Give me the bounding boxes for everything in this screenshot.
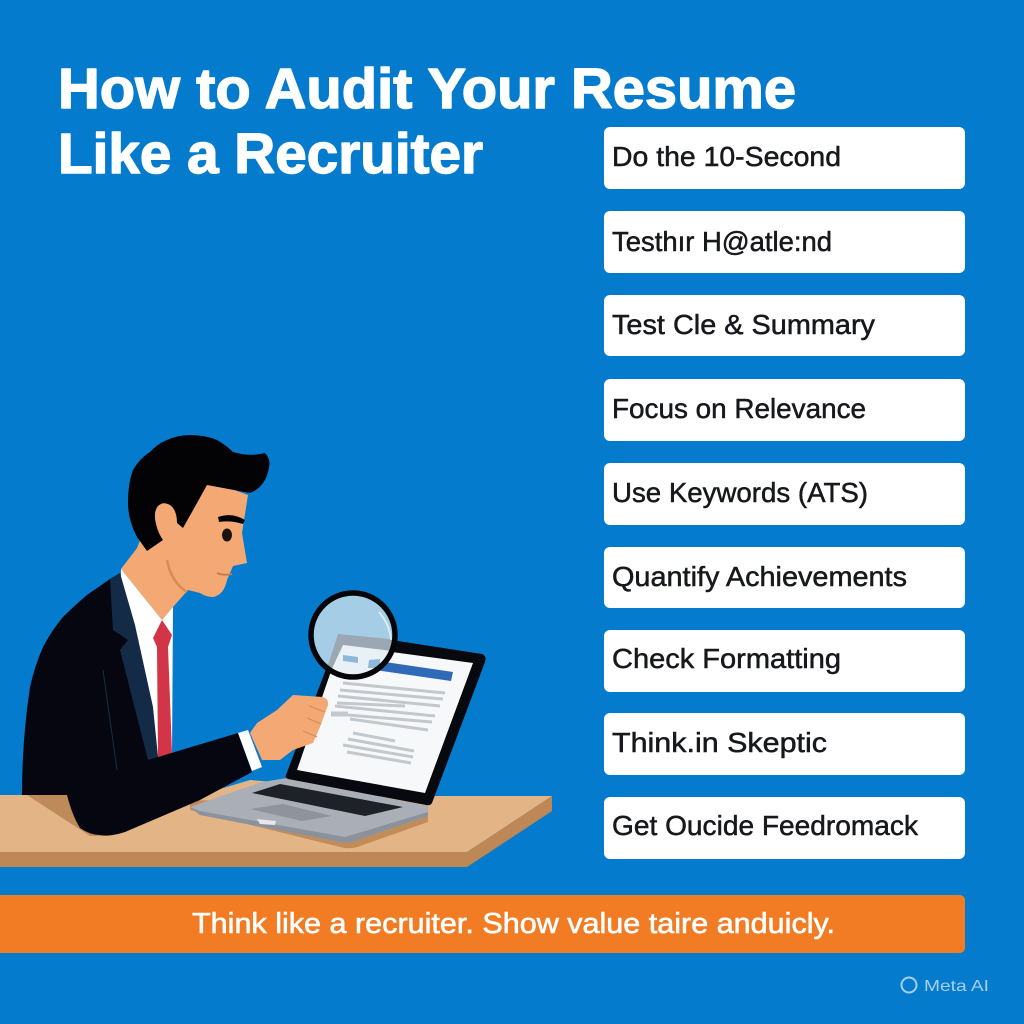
laptop base xyxy=(190,778,428,843)
watermark: Meta AI xyxy=(902,978,989,995)
item 8 xyxy=(604,713,965,775)
shirt cuff xyxy=(238,730,262,771)
item 1 xyxy=(604,127,965,189)
neck and face xyxy=(121,480,248,620)
title: Like a Recruiter xyxy=(58,122,483,186)
trackpad xyxy=(250,804,332,821)
title xyxy=(58,57,796,186)
suit xyxy=(22,573,252,836)
keyboard xyxy=(252,784,403,816)
item 1: Do the 10-Second xyxy=(612,141,841,172)
item 4 xyxy=(604,379,965,441)
illustration: recruiter auditing resume on a laptop xyxy=(0,435,552,867)
item 2 xyxy=(604,211,965,273)
eyebrow and eye xyxy=(218,515,245,524)
resume text lines xyxy=(331,683,445,763)
screen bezel xyxy=(286,632,486,805)
sleeve crease xyxy=(103,670,117,770)
item 7: Check Formatting xyxy=(612,643,841,674)
hair xyxy=(128,435,270,551)
item 6: Quantify Achievements xyxy=(612,561,907,592)
desk xyxy=(0,780,552,867)
item 3 xyxy=(604,295,965,356)
watermark: Meta AI: Meta AI xyxy=(924,978,989,995)
person xyxy=(22,435,270,836)
item 3: Test Cle & Summary xyxy=(612,309,875,340)
front notch xyxy=(257,819,276,825)
tie xyxy=(153,620,172,757)
lapel xyxy=(110,573,158,760)
magnifying glass xyxy=(311,593,400,690)
item 4: Focus on Relevance xyxy=(612,393,866,424)
item 7 xyxy=(604,630,965,692)
item 8: Think.in Skeptic xyxy=(612,727,827,758)
item 2: Testhır H@atle:nd xyxy=(612,226,832,257)
item 9 xyxy=(604,797,965,859)
mouth xyxy=(217,573,232,575)
hand holding magnifier xyxy=(250,695,328,760)
item 5: Use Keywords (ATS) xyxy=(612,477,868,508)
takeaway banner: Think like a recruiter. Show value taire anduicly. xyxy=(192,908,835,940)
header stripe xyxy=(375,662,453,681)
item 9: Get Oucide Feedromack xyxy=(612,810,918,841)
item 6 xyxy=(604,547,965,608)
title: How to Audit Your Resume xyxy=(58,57,796,121)
takeaway banner xyxy=(0,895,965,953)
laptop xyxy=(190,632,486,843)
item 5 xyxy=(604,463,965,525)
jaw shadow xyxy=(167,560,187,592)
screen display xyxy=(297,645,473,793)
shirt xyxy=(120,569,173,757)
checklist xyxy=(604,127,965,859)
